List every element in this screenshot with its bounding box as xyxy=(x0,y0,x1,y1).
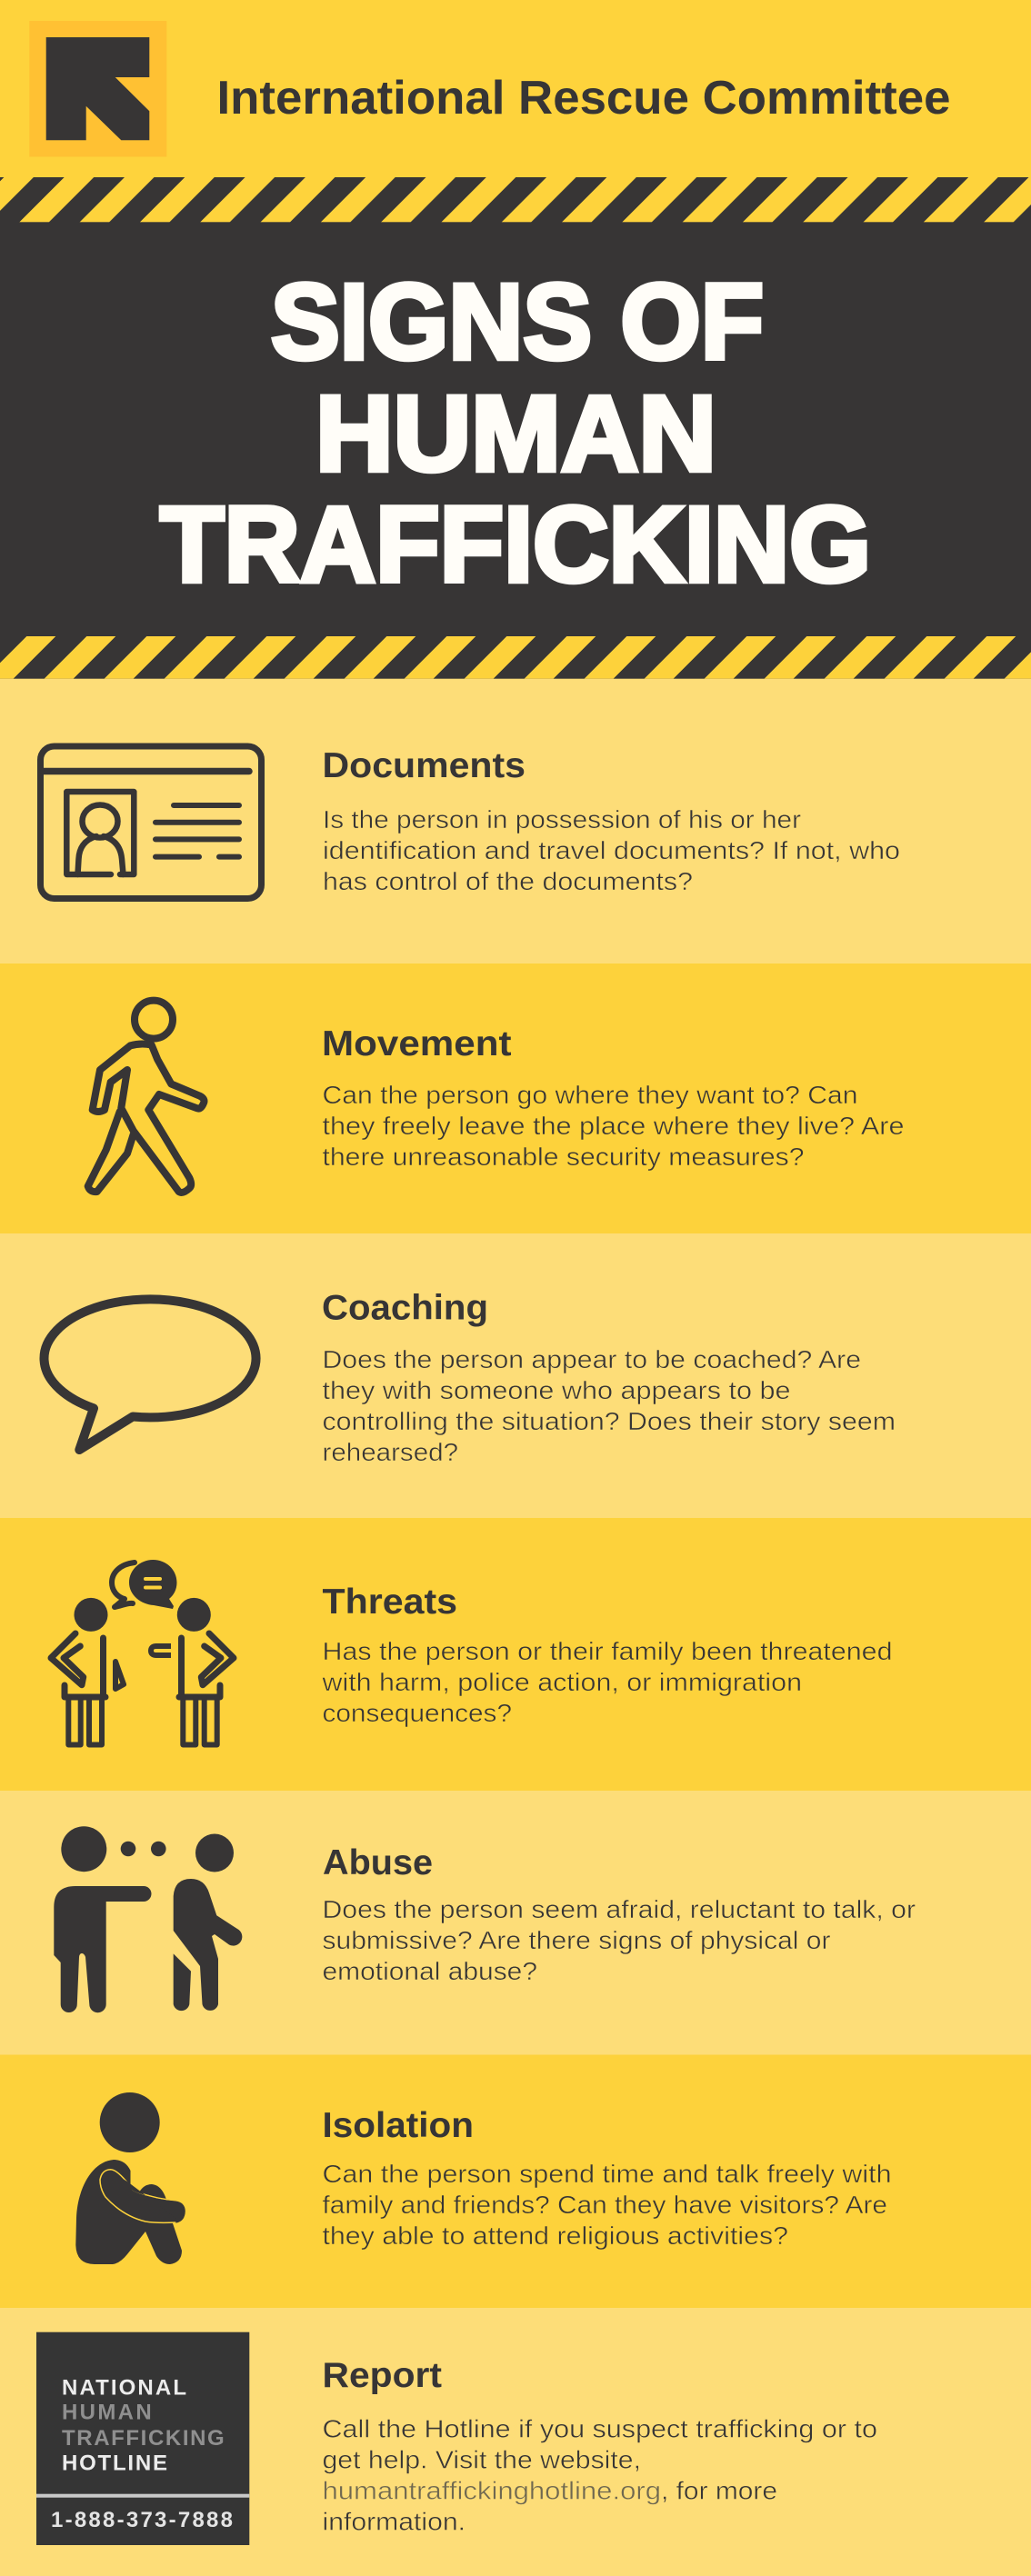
title: HUMAN xyxy=(315,374,716,494)
panel: isolation xyxy=(0,2054,1031,2308)
text: documents: has control of the documents? xyxy=(323,867,693,895)
panel: documents xyxy=(0,679,1031,964)
text: report: get help. Visit the website, xyxy=(322,2445,641,2474)
hotline badge: 1-888-373-7888 xyxy=(51,2508,233,2532)
text: coaching xyxy=(322,1345,896,1466)
text: coaching: Does the person appear to be coached? Are xyxy=(322,1345,861,1373)
text: isolation: family and friends? Can they have visitors? Are xyxy=(322,2191,887,2219)
text: isolation: they able to attend religious activities? xyxy=(322,2222,788,2250)
title: SIGNS OF xyxy=(271,262,764,382)
icon: speech bubble xyxy=(45,1299,256,1450)
text: coaching: they with someone who appears to be xyxy=(322,1376,791,1404)
text: coaching: controlling the situation? Does their story seem xyxy=(322,1407,896,1435)
text: abuse xyxy=(322,1895,916,1985)
panel: report xyxy=(0,2308,1031,2576)
text: threats xyxy=(321,1637,893,1727)
heading: documents: Documents xyxy=(322,746,526,785)
text: movement xyxy=(322,1081,904,1171)
hotline badge: TRAFFICKING xyxy=(62,2426,225,2451)
hotline badge: NATIONAL xyxy=(62,2375,186,2400)
hotline badge xyxy=(36,2332,249,2545)
panel: coaching xyxy=(0,1233,1031,1518)
text: abuse: Does the person seem afraid, reluctant to talk, or xyxy=(322,1895,916,1923)
text: abuse: emotional abuse? xyxy=(322,1957,537,1985)
heading: threats: Threats xyxy=(322,1583,457,1622)
text: movement: Can the person go where they want to? Can xyxy=(322,1081,858,1109)
heading: report: Report xyxy=(322,2356,442,2395)
text: abuse: submissive? Are there signs of physical or xyxy=(322,1926,831,1954)
heading: coaching: Coaching xyxy=(322,1289,488,1328)
title banner xyxy=(0,177,1031,679)
organisation name: International Rescue Committee xyxy=(216,72,951,125)
text: threats: with harm, police action, or immigration xyxy=(321,1668,802,1696)
text: documents: identification and travel documents? If not, who xyxy=(323,836,900,864)
text: threats: consequences? xyxy=(322,1699,512,1727)
text: report xyxy=(322,2414,877,2536)
text: report: information. xyxy=(322,2507,465,2536)
heading: movement: Movement xyxy=(322,1024,512,1063)
text: isolation xyxy=(322,2160,891,2250)
icon: person pointing at another person xyxy=(54,1826,242,2012)
text: coaching: rehearsed? xyxy=(322,1438,458,1466)
text: report: Call the Hotline if you suspect trafficking or to xyxy=(322,2414,877,2443)
heading: abuse: Abuse xyxy=(323,1843,433,1882)
icon: walking person xyxy=(88,1001,204,1193)
title xyxy=(160,262,871,605)
text: report: humantraffickinghotline.org xyxy=(322,2476,661,2505)
heading: isolation: Isolation xyxy=(322,2106,474,2145)
panel: abuse xyxy=(0,1791,1031,2054)
text: movement: there unreasonable security measures? xyxy=(322,1143,804,1171)
hotline badge: HUMAN xyxy=(62,2401,152,2425)
icon: two people arguing xyxy=(51,1560,234,1745)
icon: IRC logo xyxy=(29,21,166,156)
text: documents xyxy=(323,805,900,895)
text: movement: they freely leave the place where they live? Are xyxy=(322,1112,904,1140)
icon: person sitting alone xyxy=(75,2092,185,2264)
icon: ID card xyxy=(40,746,262,898)
panel: threats xyxy=(0,1518,1031,1791)
panel: movement xyxy=(0,964,1031,1233)
text: documents: Is the person in possession of his or her xyxy=(323,805,801,834)
text: threats: Has the person or their family been threatened xyxy=(322,1637,893,1665)
header band xyxy=(0,0,1031,177)
title: TRAFFICKING xyxy=(160,485,871,605)
text: isolation: Can the person spend time and talk freely with xyxy=(322,2160,891,2188)
text: report: , for more xyxy=(661,2476,777,2505)
hotline badge: HOTLINE xyxy=(62,2451,167,2476)
